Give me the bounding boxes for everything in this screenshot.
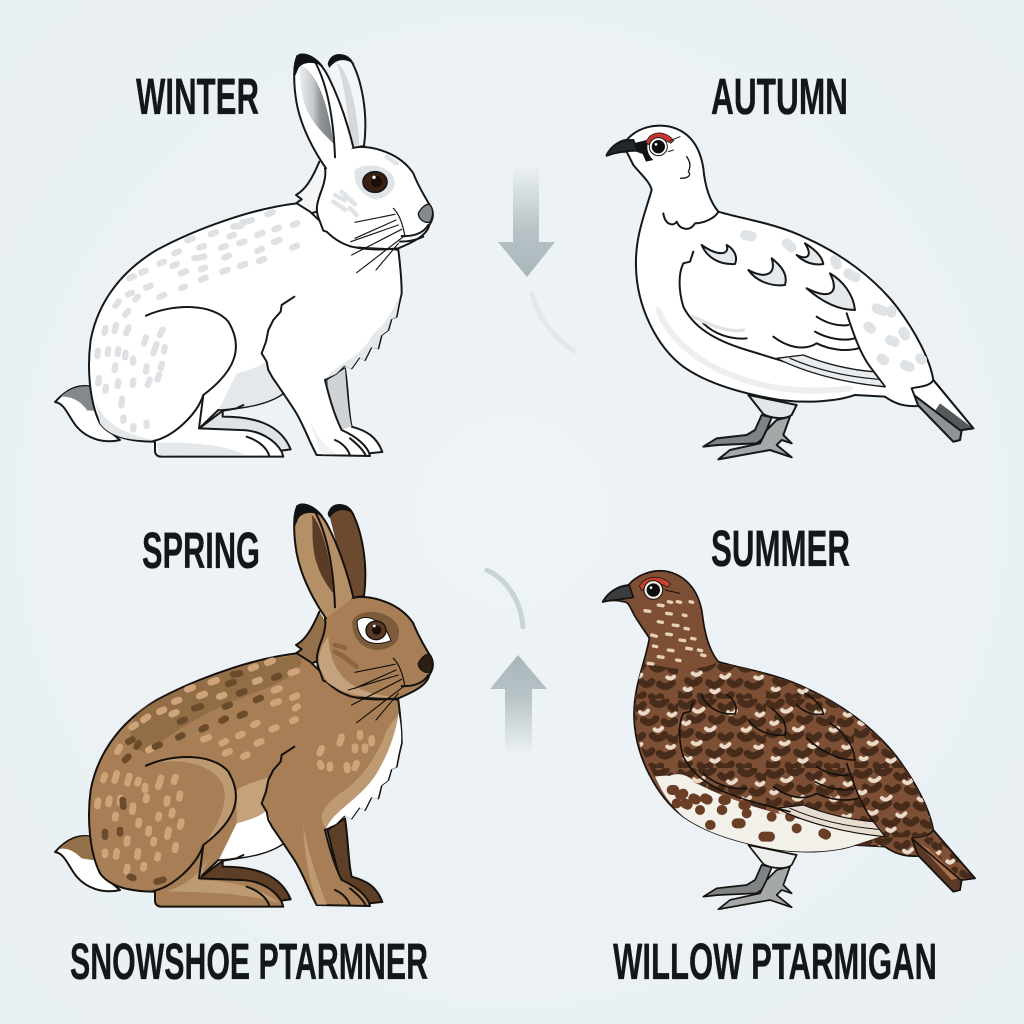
hare: winter white coat xyxy=(55,54,433,457)
body and head xyxy=(603,571,933,856)
legs and feet xyxy=(703,845,797,909)
far legs xyxy=(199,818,382,903)
neck ruff xyxy=(293,162,330,213)
hind thigh xyxy=(146,307,236,441)
tail xyxy=(55,386,120,441)
label: Summer: SUMMER xyxy=(711,520,850,577)
tail xyxy=(898,380,973,442)
winter back and hip spots xyxy=(97,212,297,429)
wing xyxy=(680,693,885,837)
near ear xyxy=(294,504,353,618)
ptarmigan: autumn white plumage xyxy=(607,126,973,459)
scalloped plumage pattern xyxy=(634,660,933,856)
far ear xyxy=(328,504,365,598)
dark coat spots xyxy=(105,673,279,882)
beak xyxy=(603,585,633,602)
plumage mottling xyxy=(730,235,922,367)
body and head xyxy=(607,126,933,406)
tail xyxy=(898,830,975,892)
light coat spots xyxy=(97,661,372,872)
body shading xyxy=(95,293,401,456)
cheek xyxy=(681,157,690,178)
label: Snowshoe Ptarmner: SNOWSHOE PTARMNER xyxy=(70,933,428,990)
arrow: down from autumn to summer xyxy=(498,165,574,351)
face xyxy=(639,577,680,599)
beak xyxy=(607,140,637,156)
near ear xyxy=(294,54,353,168)
face mask and comb xyxy=(632,133,680,162)
body xyxy=(89,653,402,907)
far legs xyxy=(199,368,382,453)
head xyxy=(317,597,433,723)
legs and feet xyxy=(703,395,797,459)
label: Spring: SPRING xyxy=(142,522,260,579)
head xyxy=(317,147,433,273)
label: Winter: WINTER xyxy=(136,68,259,125)
neck ruff xyxy=(663,212,718,229)
hind thigh xyxy=(146,757,236,891)
hare: spring brown coat xyxy=(55,504,433,907)
lower body shading xyxy=(658,310,850,391)
tail xyxy=(55,836,120,891)
body xyxy=(89,203,402,457)
body colour patches xyxy=(130,655,401,905)
arrow: up from spring to winter xyxy=(487,570,547,755)
leg and fur lines xyxy=(199,297,366,456)
label: Autumn: AUTUMN xyxy=(711,68,848,125)
far ear xyxy=(328,54,365,148)
belly xyxy=(655,776,880,852)
ptarmigan: summer mottled plumage xyxy=(603,571,975,909)
head speckles xyxy=(645,602,705,664)
neck ruff xyxy=(293,612,330,663)
leg and fur lines xyxy=(199,747,366,906)
wing xyxy=(680,243,885,387)
